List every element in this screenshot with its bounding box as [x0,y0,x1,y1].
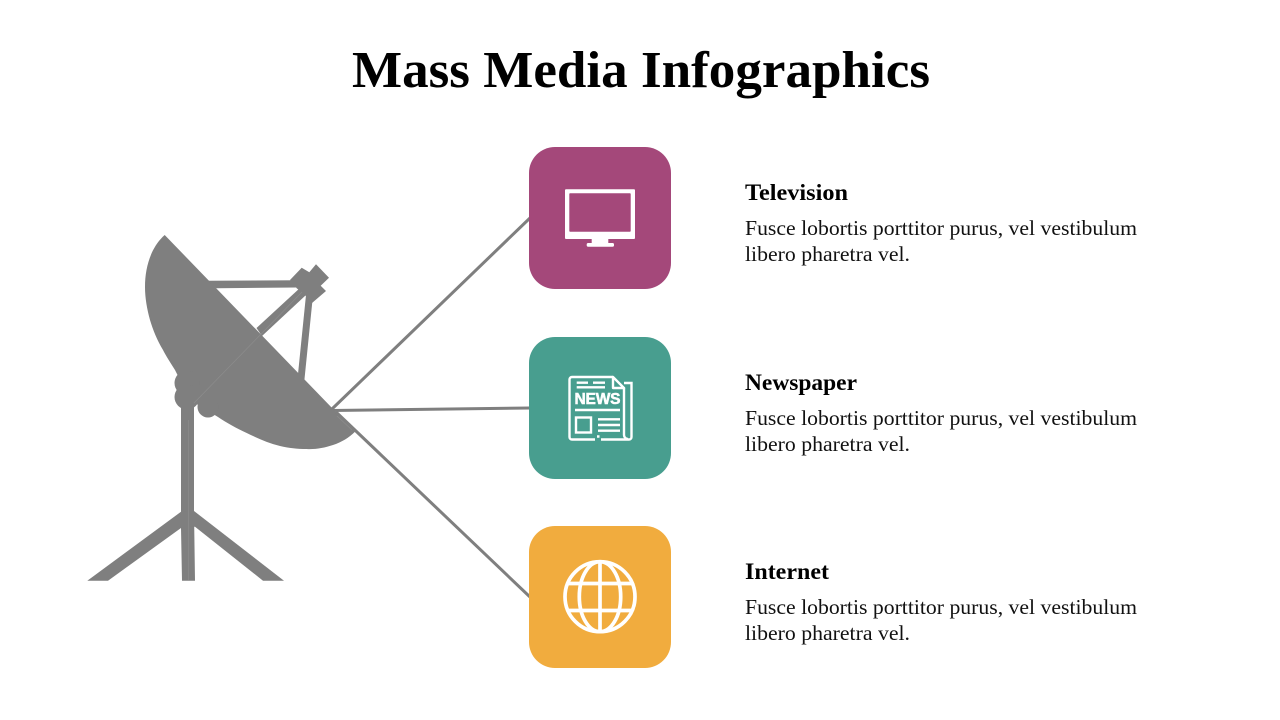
television heading: Television [745,180,848,205]
icon: newspaper: NEWS [574,391,620,408]
newspaper description: libero pharetra vel. [745,432,910,456]
icon: newspaper [570,377,632,440]
television card [529,147,671,289]
icon: globe [565,562,635,632]
connector lines [332,218,530,597]
internet description: libero pharetra vel. [745,621,910,645]
title: Mass Media Infographics [352,42,930,99]
panel: newspaper [529,337,1137,479]
hairlines on dish [188,292,352,580]
television description: Fusce lobortis porttitor purus, vel vestibulum [745,216,1137,240]
internet heading: Internet [745,559,829,584]
icon: television [565,189,635,247]
television description: libero pharetra vel. [745,242,910,266]
internet card [529,526,671,668]
internet description: Fusce lobortis porttitor purus, vel vestibulum [745,595,1137,619]
television description [745,216,1137,266]
newspaper heading: Newspaper [745,370,857,395]
newspaper description [745,406,1137,456]
internet description [745,595,1137,645]
icon: satellite dish [87,235,355,581]
newspaper description: Fusce lobortis porttitor purus, vel vestibulum [745,406,1137,430]
panel: internet [529,526,1137,668]
panel: television [529,147,1137,289]
newspaper card [529,337,671,479]
